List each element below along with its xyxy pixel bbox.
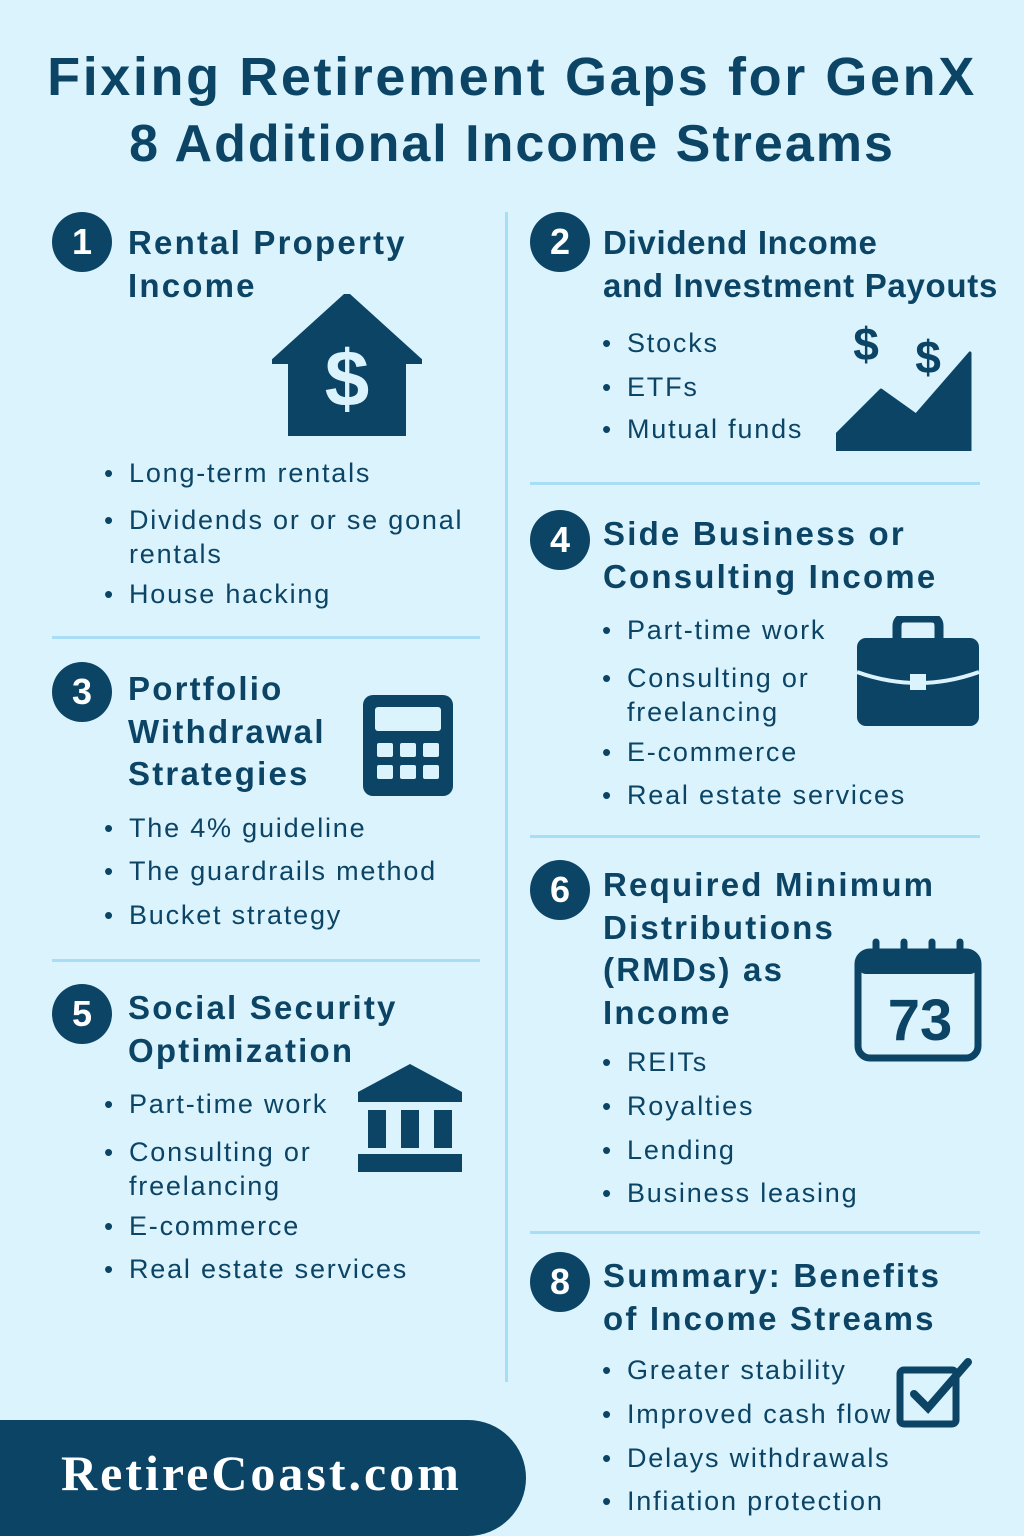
icon: checkbox xyxy=(896,1358,972,1428)
panel: 4 side business: E-commerce xyxy=(627,737,798,767)
number badge 8 xyxy=(530,1252,590,1312)
heading 4: Side Business or xyxy=(603,515,906,552)
panel: 8 summary xyxy=(530,1252,972,1516)
heading 2 xyxy=(603,224,998,304)
heading 3 xyxy=(128,670,326,792)
footer: brand pill xyxy=(0,1420,526,1536)
panel: 6 RMDs: Royalties xyxy=(627,1091,754,1121)
heading 8: of Income Streams xyxy=(603,1300,936,1336)
heading 6: Required Minimum xyxy=(603,866,935,903)
heading 3: Strategies xyxy=(128,755,310,792)
panel: 4 side business xyxy=(530,510,979,810)
panel: 5 social security: E-commerce xyxy=(129,1211,300,1241)
number badge 5: 5 xyxy=(72,993,92,1034)
heading 2: and Investment Payouts xyxy=(603,266,998,304)
number badge 5 xyxy=(52,984,112,1044)
panel: 6 RMDs xyxy=(530,860,982,1208)
panel: 1 rental property: House hacking xyxy=(129,579,331,609)
number badge 1 xyxy=(52,212,112,272)
icon: house with dollar xyxy=(272,294,422,436)
icon: house with dollar: $ xyxy=(325,334,369,423)
panel: 1 rental property: rentals xyxy=(129,539,223,569)
heading 6: (RMDs) as xyxy=(603,951,784,988)
bullets 1: Long-term rentals xyxy=(129,458,371,488)
bullets 5: Part-time work xyxy=(129,1089,328,1119)
heading 6: Distributions xyxy=(603,908,835,946)
panel: 5 social security xyxy=(52,984,462,1284)
heading 6 xyxy=(603,866,935,1030)
bullets 3: The 4% guideline xyxy=(129,813,366,843)
panel: 6 RMDs: Business leasing xyxy=(627,1178,858,1208)
heading 8: Summary: Benefits xyxy=(603,1257,941,1294)
number badge 2 xyxy=(530,212,590,272)
bullets 6: REITs xyxy=(627,1047,708,1077)
panel: 4 side business: Consulting or xyxy=(627,663,810,693)
number badge 3: 3 xyxy=(72,671,92,712)
panel: 8 summary: Improved cash flow xyxy=(627,1399,892,1429)
number badge 4: 4 xyxy=(550,519,570,560)
heading 4 xyxy=(603,515,937,595)
heading 4: Consulting Income xyxy=(603,558,937,594)
icon: calendar 73: 73 xyxy=(888,988,952,1053)
heading 2: Dividend Income xyxy=(603,224,878,261)
panel: 4 side business: Real estate services xyxy=(627,780,906,810)
icon: briefcase xyxy=(857,616,979,726)
title: Fixing Retirement Gaps for GenX xyxy=(47,47,977,107)
icon: rising chart with dollars: $ xyxy=(853,318,879,370)
panel: 3 portfolio withdrawal xyxy=(52,662,453,930)
panel: 3 portfolio withdrawal: Bucket strategy xyxy=(129,900,342,930)
bullets 8: Greater stability xyxy=(627,1355,847,1385)
icon: rising chart with dollars xyxy=(836,318,972,451)
number badge 8: 8 xyxy=(550,1261,570,1302)
number badge 3 xyxy=(52,662,112,722)
bullets 2: Stocks xyxy=(627,328,719,358)
heading 3: Withdrawal xyxy=(128,712,326,750)
number badge 4 xyxy=(530,510,590,570)
icon: rising chart with dollars: $ xyxy=(915,331,941,383)
panel: 3 portfolio withdrawal: The guardrails method xyxy=(129,856,437,886)
panel: 2 dividend income: Mutual funds xyxy=(627,414,803,444)
title xyxy=(47,47,977,173)
footer: brand pill: RetireCoast.com xyxy=(61,1445,462,1501)
panel: 5 social security: Real estate services xyxy=(129,1254,408,1284)
title: 8 Additional Income Streams xyxy=(129,115,895,173)
panel: 5 social security: freelancing xyxy=(129,1171,281,1201)
bullets 4: Part-time work xyxy=(627,615,826,645)
heading 5: Social Security xyxy=(128,989,398,1026)
icon: calculator xyxy=(363,695,453,796)
panel: 1 rental property xyxy=(52,212,463,609)
number badge 2: 2 xyxy=(550,221,570,262)
heading 1 xyxy=(128,224,407,304)
panel: 1 rental property: Dividends or or se gonal xyxy=(129,505,463,535)
heading 5 xyxy=(128,989,398,1069)
heading 1: Income xyxy=(128,266,257,304)
panel: 8 summary: Delays withdrawals xyxy=(627,1443,890,1473)
vertical divider xyxy=(505,212,508,1382)
panel: 2 dividend income: ETFs xyxy=(627,372,699,402)
panel: 6 RMDs: Lending xyxy=(627,1135,736,1165)
number badge 6 xyxy=(530,860,590,920)
icon: calendar 73 xyxy=(854,938,982,1062)
heading 5: Optimization xyxy=(128,1032,354,1068)
panel: 8 summary: Infiation protection xyxy=(627,1486,884,1516)
panel: 5 social security: Consulting or xyxy=(129,1137,312,1167)
heading 6: Income xyxy=(603,994,732,1030)
heading 8 xyxy=(603,1257,941,1336)
panel: 4 side business: freelancing xyxy=(627,697,779,727)
heading 3: Portfolio xyxy=(128,670,283,707)
panel: 2 dividend income xyxy=(530,212,998,451)
heading 1: Rental Property xyxy=(128,224,407,261)
number badge 1: 1 xyxy=(72,221,92,262)
icon: bank xyxy=(358,1064,462,1172)
number badge 6: 6 xyxy=(550,869,570,910)
